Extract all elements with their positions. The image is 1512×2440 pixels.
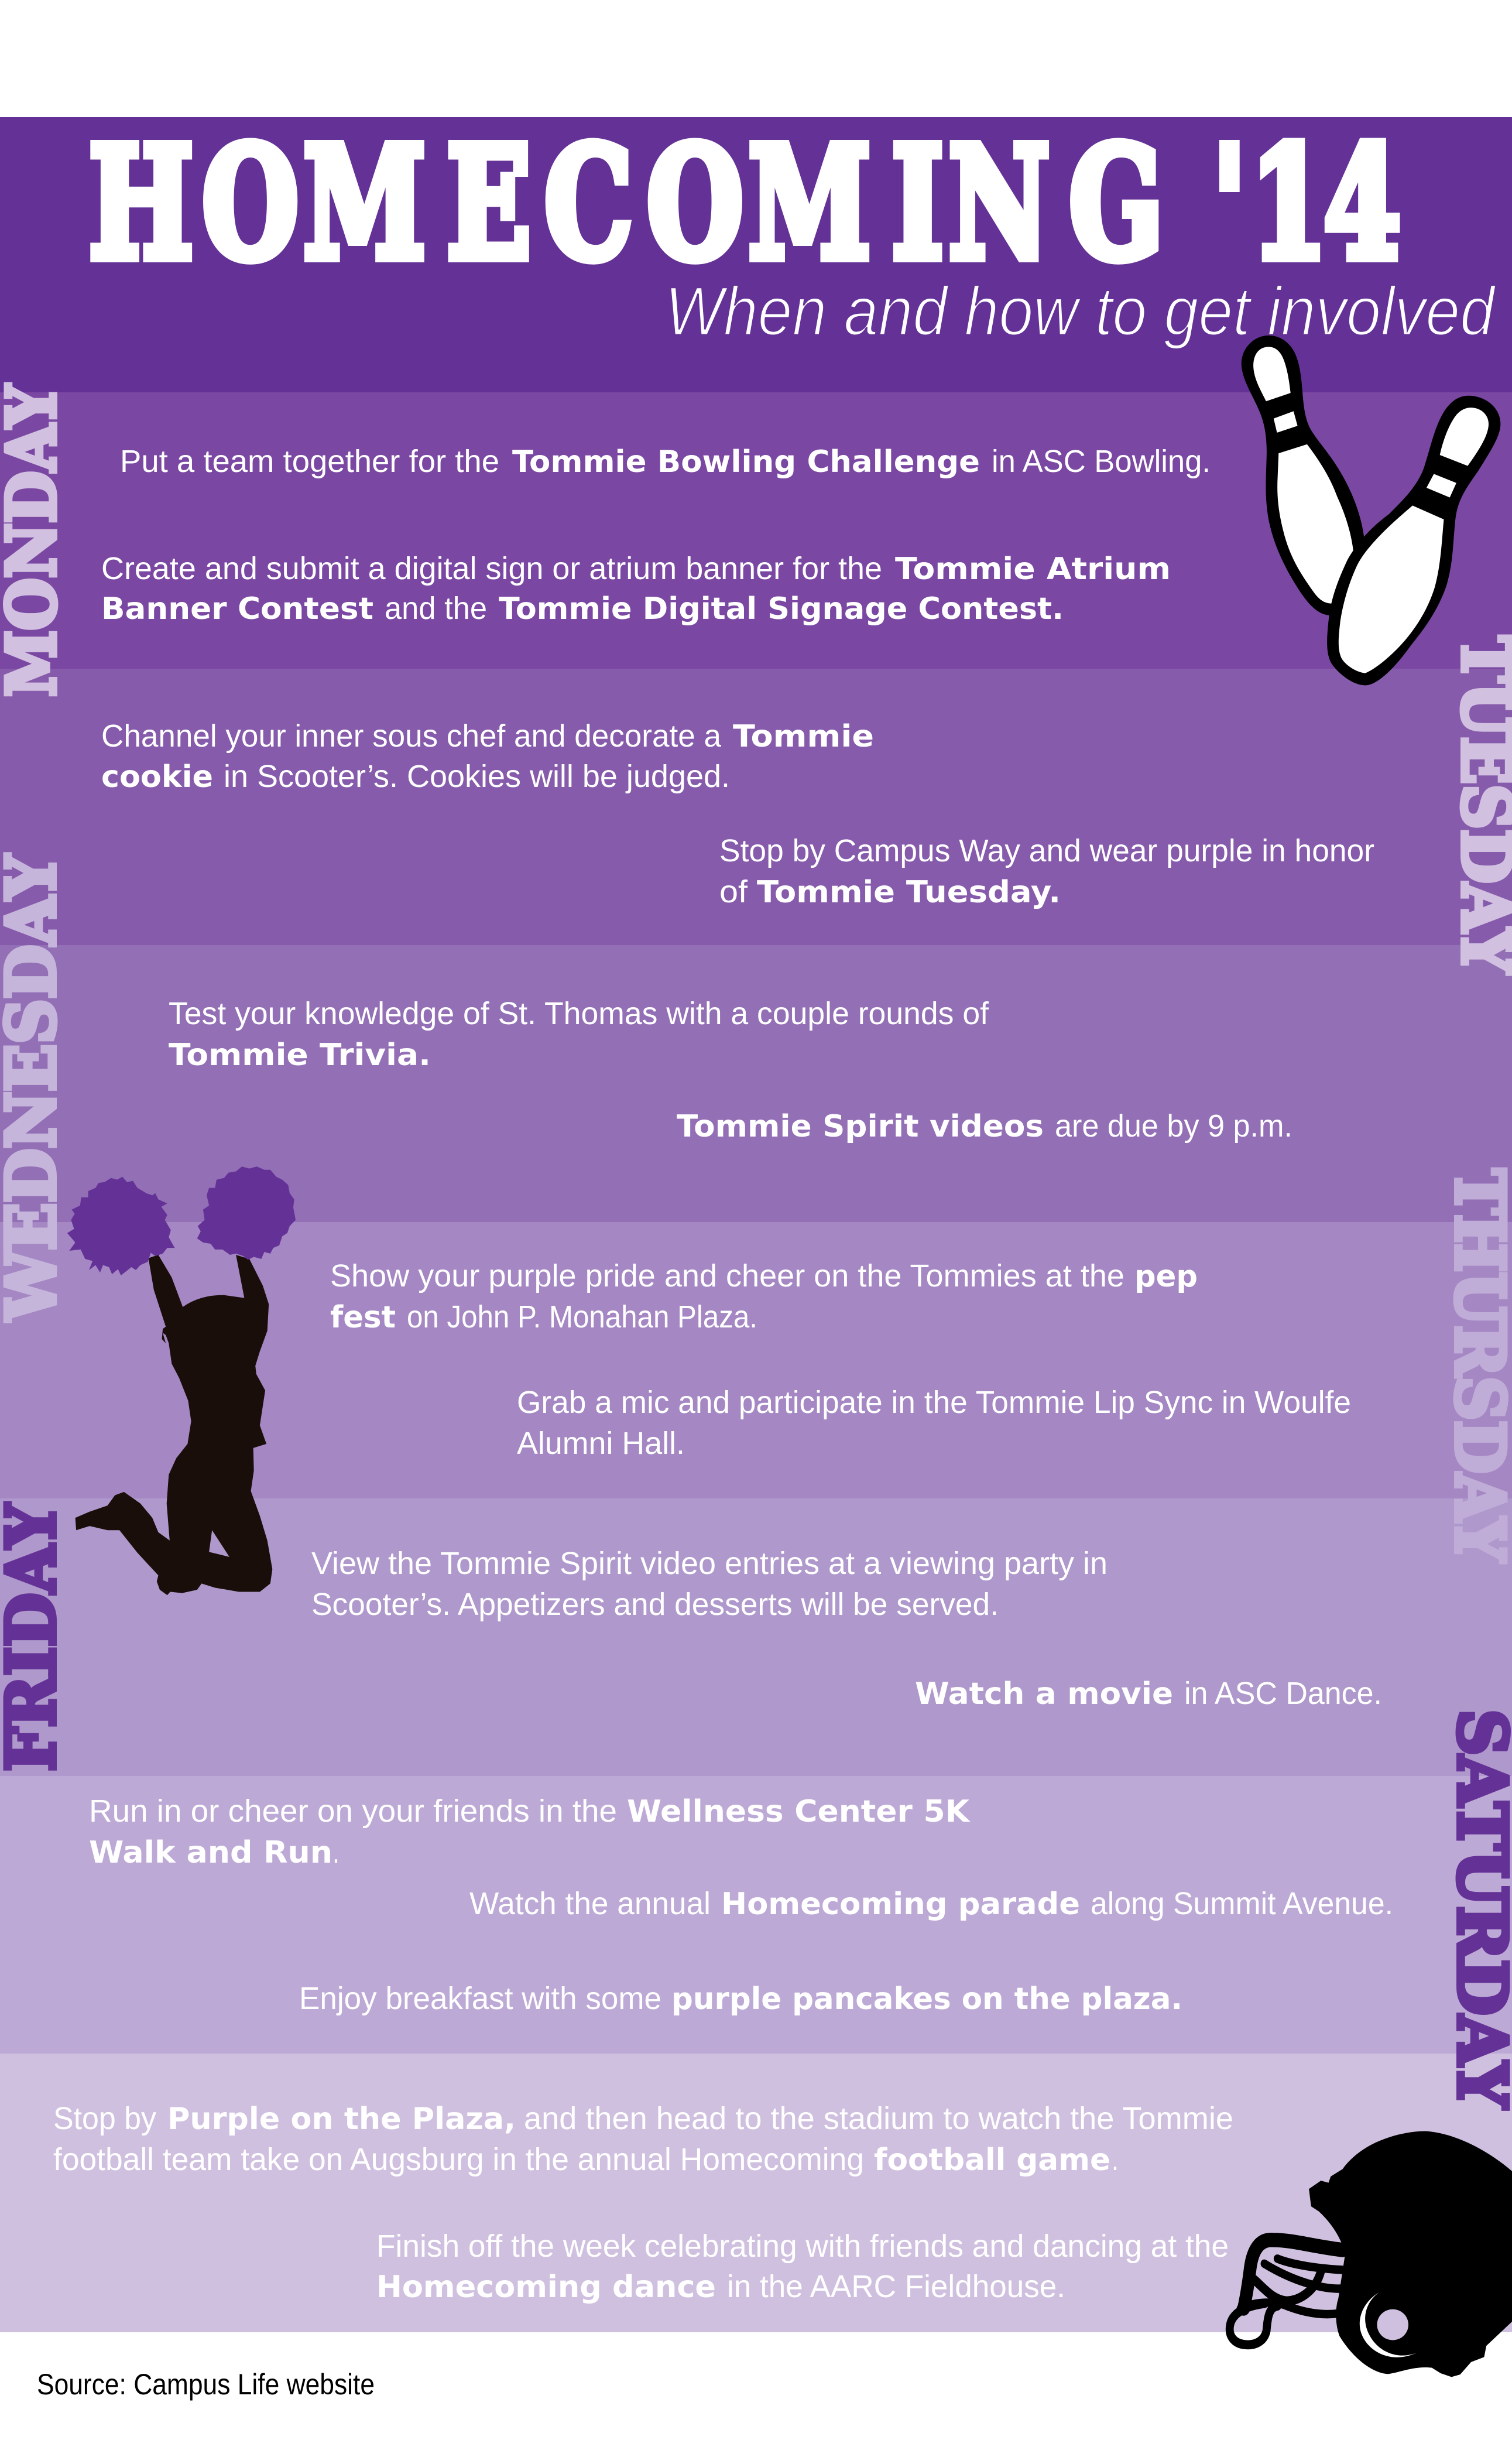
text: banner contest: Tommie Atrium [895, 552, 1171, 587]
text: viewing party: Scooter’s. Appetizers and desserts will be served. [311, 1587, 999, 1622]
text: purple on the plaza: Stop by [53, 2101, 156, 2136]
text: purple on the plaza: Purple on the Plaza, [167, 2102, 516, 2137]
text: bowling challenge [120, 444, 1211, 480]
text: watch a movie: in ASC Dance. [1184, 1676, 1382, 1711]
icon: helmet highlight [1360, 2292, 1417, 2357]
text: homecoming parade: along Summit Avenue. [1091, 1886, 1393, 1921]
text: wellness center 5K: Walk and Run [89, 1835, 332, 1870]
icon: right pom-pom [197, 1166, 296, 1260]
text: homecoming dance: in the AARC Fieldhouse. [727, 2269, 1065, 2304]
text: banner contest: Tommie Digital Signage Contest. [499, 591, 1064, 627]
panel: Wednesday [0, 945, 1512, 1222]
text: pep fest: Show your purple pride and cheer on the Tommies at the [330, 1258, 1124, 1293]
text: homecoming dance: Homecoming dance [376, 2270, 716, 2305]
text: wellness center 5K [89, 1794, 971, 1870]
text: tommie tuesday: Stop by Campus Way and wear purple in honor [719, 833, 1374, 868]
text: pep fest [330, 1258, 1198, 1335]
text: watch a movie: Watch a movie [915, 1676, 1173, 1712]
text: pep fest: fest [330, 1300, 396, 1335]
panel: Saturday [0, 1776, 1512, 2054]
text: wellness center 5K: Wellness Center 5K [627, 1794, 971, 1829]
icon: left pom-pom [67, 1177, 174, 1275]
text: banner contest [101, 551, 1171, 627]
text: tommie cookie: Channel your inner sous chef and decorate a [101, 718, 722, 754]
text: viewing party [311, 1546, 1108, 1622]
text: purple on the plaza: football game [874, 2143, 1110, 2178]
text: tommie cookie: Tommie [733, 719, 874, 754]
text: purple on the plaza [53, 2101, 1233, 2178]
icon: ear hole [1377, 2309, 1408, 2340]
text: lip sync: Alumni Hall. [517, 1426, 685, 1461]
text: tommie trivia: Test your knowledge of St. Thomas with a couple rounds of [169, 996, 989, 1031]
text: tommie trivia [169, 996, 989, 1073]
icon: right bowling pin [1327, 396, 1500, 685]
text: banner contest: Banner Contest [101, 591, 373, 627]
text: viewing party: View the Tommie Spirit video entries at a viewing party in [311, 1546, 1108, 1581]
text: tommie tuesday: Tommie Tuesday. [757, 875, 1061, 910]
text: spirit videos [677, 1108, 1292, 1144]
icon: left bowling pin [1242, 336, 1364, 615]
icon: cheerleader jumping [67, 1166, 296, 1595]
text: homecoming parade: Watch the annual [469, 1886, 711, 1921]
text: tommie cookie: cookie [101, 759, 213, 795]
text: homecoming parade: Homecoming parade [721, 1887, 1080, 1922]
text: homecoming dance: Finish off the week celebrating with friends and dancing at the [376, 2229, 1229, 2264]
text: wellness center 5K: Run in or cheer on your friends in the [89, 1794, 617, 1829]
icon: helmet shell [1309, 2131, 1512, 2377]
text: spirit videos: are due by 9 p.m. [1055, 1108, 1292, 1144]
text: purple on the plaza: and then head to the stadium to watch the Tommie [524, 2101, 1233, 2136]
text: wellness center 5K: . [332, 1835, 340, 1870]
panel: Sunday [0, 2054, 1512, 2332]
text: watch a movie [915, 1676, 1382, 1712]
text: tommie cookie: in Scooter’s. Cookies will be judged. [224, 759, 730, 794]
text: tommie tuesday [719, 833, 1374, 910]
text: tommie trivia: Tommie Trivia. [169, 1038, 431, 1073]
text: purple pancakes: Enjoy breakfast with some [299, 1981, 661, 2016]
text: bowling challenge: in ASC Bowling. [992, 444, 1211, 479]
text: bowling challenge: Tommie Bowling Challenge [512, 444, 980, 480]
text: homecoming parade [469, 1886, 1393, 1922]
panel: Thursday [0, 1222, 1512, 1498]
text: lip sync: Grab a mic and participate in the Tommie Lip Sync in Woulfe [517, 1385, 1351, 1420]
text: banner contest: and the [385, 591, 487, 626]
text: tommie tuesday: of [719, 874, 748, 909]
source note: Source: Campus Life website [37, 2368, 375, 2401]
text: purple pancakes: purple pancakes on the plaza. [671, 1982, 1182, 2017]
text: bowling challenge: Put a team together for the [120, 444, 499, 479]
text: pep fest: on John P. Monahan Plaza. [407, 1299, 757, 1334]
icon: cheerleader silhouette [76, 1255, 272, 1595]
panel: header [0, 113, 1512, 392]
text: tommie cookie [101, 718, 874, 795]
text: pep fest: pep [1134, 1259, 1198, 1294]
panel: Tuesday [0, 669, 1512, 945]
icon: face mask [1230, 2240, 1343, 2345]
text: lip sync [517, 1385, 1351, 1461]
text: purple on the plaza: . [1112, 2142, 1119, 2177]
text: purple pancakes [299, 1981, 1182, 2017]
title: HOMECOMING '14 [89, 113, 1401, 293]
icon: bowling pins [1242, 336, 1500, 685]
text: banner contest: Create and submit a digital sign or atrium banner for the [101, 551, 882, 586]
panel: Monday [0, 392, 1512, 669]
text: spirit videos: Tommie Spirit videos [677, 1109, 1044, 1144]
icon: football helmet [1230, 2131, 1512, 2377]
text: purple on the plaza: football team take on Augsburg in the annual Homecoming [53, 2142, 864, 2177]
text: homecoming dance [376, 2229, 1229, 2305]
panel: Friday [0, 1498, 1512, 1776]
